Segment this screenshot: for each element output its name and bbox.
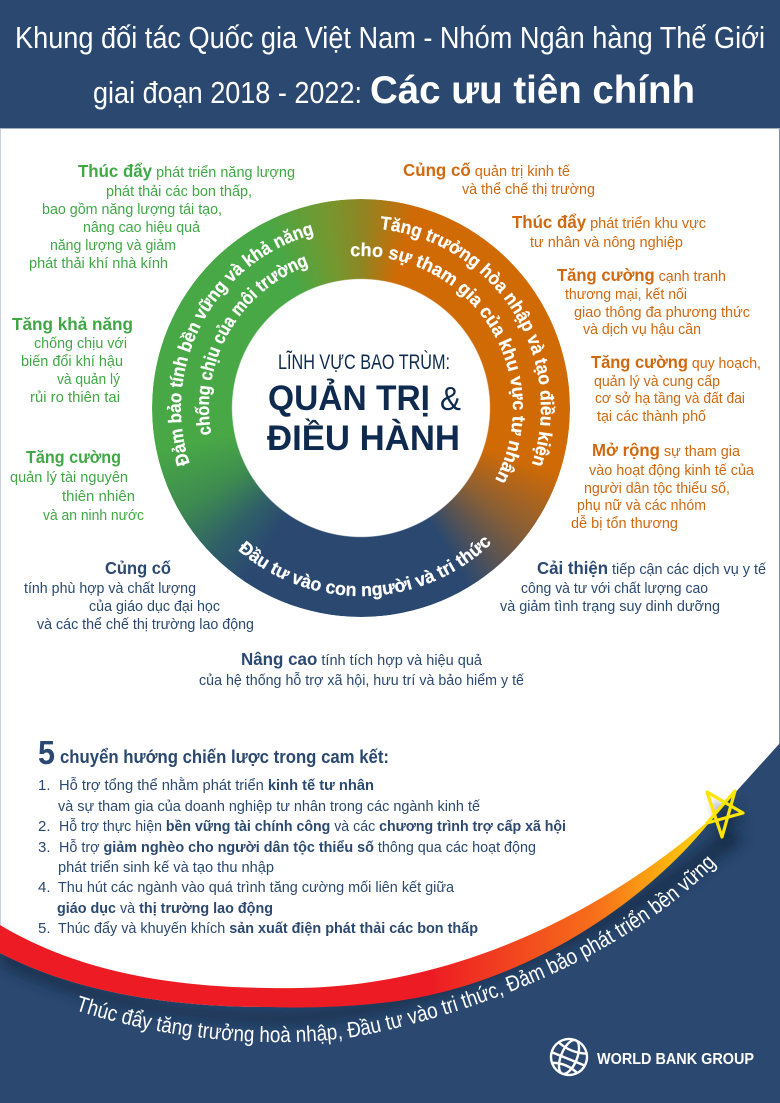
navy text: higher education (24, 558, 254, 633)
commitments list (38, 777, 566, 937)
navy text: social protection: của hệ thống hỗ trợ xã hội, hưu trí và bảo hiểm y tế (199, 672, 525, 689)
commitments heading: chuyển hướng chiến lược trong cam kết: (60, 747, 389, 767)
orange text: trade and logistics: thương mại, kết nối (565, 286, 687, 303)
navy text: higher education: và các thể chế thị trường lao động (37, 616, 254, 633)
curved footer slogan: Thúc đẩy tăng trưởng hoà nhập, Đầu tư vào tri thức, Đảm bảo phát triển bền vững (79, 856, 718, 1046)
navy text: health (500, 558, 767, 615)
commitments list: Hỗ trợ giảm nghèo cho người dân tộc thiểu số thông qua các hoạt động (59, 839, 536, 856)
title: giai đoạn 2018 - 2022: (93, 75, 362, 110)
commitments heading (38, 734, 389, 771)
center: cross-cutting area: LĨNH VỰC BAO TRÙM: (278, 350, 450, 374)
ring labels: Tăng trưởng hòa nhập và tạo điều kiện (381, 216, 556, 466)
commitments list: 5. (38, 920, 51, 937)
title (15, 20, 765, 112)
star icon (707, 791, 743, 837)
green text: resilience (12, 314, 133, 406)
center: cross-cutting area (267, 350, 461, 458)
orange text: urban planning: Tăng cường quy hoạch, (591, 352, 761, 372)
green text: natural resources: và an ninh nước (43, 507, 144, 524)
center: cross-cutting area: & (440, 380, 461, 417)
world bank group logo: WORLD BANK GROUP (597, 1051, 754, 1068)
green text: resilience: rủi ro thiên tai (30, 389, 120, 406)
green text: energy: bao gồm năng lượng tái tạo, (42, 201, 222, 218)
ring labels (166, 216, 556, 600)
commitments heading: 5 (38, 734, 55, 771)
orange text: urban planning: tại các thành phố (597, 408, 707, 425)
commitments list: Thúc đẩy và khuyến khích sản xuất điện phát thải các bon thấp (58, 920, 478, 937)
commitments list: 4. (38, 879, 51, 896)
navy text: health: và giảm tình trạng suy dinh dưỡng (500, 598, 720, 615)
ring labels: Đảm bảo tính bền vững và khả năng (166, 224, 314, 466)
ring labels: Đầu tư vào con người và tri thức (238, 538, 490, 600)
navy text: social protection (199, 649, 525, 689)
navy text: higher education: tính phù hợp và chất lượng (24, 580, 196, 597)
navy text: social protection: Nâng cao tính tích hợp và hiệu quả (241, 649, 483, 669)
center: cross-cutting area: ĐIỀU HÀNH (267, 418, 460, 458)
star shadow (712, 799, 748, 845)
red to yellow swoosh (0, 815, 715, 1007)
commitments list: 1. (38, 777, 51, 794)
green text: resilience: chống chịu với (34, 335, 127, 352)
commitments list: phát triển sinh kế và tạo thu nhập (58, 859, 274, 876)
green text: natural resources (10, 447, 144, 524)
commitments list: Thu hút các ngành vào quá trình tăng cường mối liên kết giữa (58, 879, 455, 896)
orange text: urban planning: cơ sở hạ tầng và đất đai (595, 390, 745, 407)
navy text: higher education: của giáo dục đại học (89, 598, 220, 615)
commitments list: 2. (38, 818, 51, 835)
green text: resilience: biến đổi khí hậu (21, 353, 123, 370)
orange text: trade and logistics: và dịch vụ hậu cần (583, 321, 701, 338)
orange text: trade and logistics: Tăng cường cạnh tranh (557, 265, 726, 285)
swoosh shadow (0, 825, 745, 1024)
green text: resilience: và quản lý (57, 371, 120, 388)
commitments list: Hỗ trợ thực hiện bền vững tài chính công và các chương trình trợ cấp xã hội (59, 818, 566, 835)
orange text: inclusion: dễ bị tổn thương (571, 515, 678, 532)
commitments list: Hỗ trợ tổng thể nhằm phát triển kinh tế tư nhân (59, 777, 374, 794)
orange text: inclusion: người dân tộc thiểu số, (584, 480, 730, 497)
orange text: inclusion: vào hoạt động kinh tế của (589, 462, 755, 479)
ring labels: cho sự tham gia của khu vực tư nhân (350, 242, 525, 482)
world bank group logo (546, 1034, 754, 1080)
orange text: urban planning: quản lý và cung cấp (594, 373, 720, 390)
navy text: health: Cải thiện tiếp cận các dịch vụ y tế (537, 558, 767, 578)
commitments list: và sự tham gia của doanh nghiệp tư nhân trong các ngành kinh tế (58, 798, 481, 815)
orange text: inclusion (571, 440, 755, 532)
green text: natural resources: Tăng cường (26, 447, 121, 467)
green text: energy: phát thải các bon thấp, (106, 183, 252, 200)
green text: resilience: Tăng khả năng (12, 314, 133, 334)
orange text: inclusion: Mở rộng sự tham gia (592, 440, 741, 460)
commitments list: giáo dục và thị trường lao động (57, 900, 273, 917)
green text: energy: năng lượng và giảm (50, 237, 176, 254)
green text: energy: Thúc đẩy phát triển năng lượng (78, 161, 295, 181)
orange text: private sector (512, 212, 706, 251)
navy text: higher education: Củng cố (105, 558, 171, 578)
ring: gradient donut (152, 199, 570, 617)
ring labels: chống chịu của môi trường (194, 256, 308, 435)
orange text: trade and logistics (557, 265, 750, 338)
title: Các ưu tiên chính (370, 69, 695, 112)
orange text: economic governance (403, 160, 595, 198)
footer navy curve (0, 743, 780, 1103)
orange text: economic governance: Củng cố quản trị kinh tế (403, 160, 571, 180)
green text: natural resources: quản lý tài nguyên (10, 469, 128, 486)
green text: energy: phát thải khí nhà kính (29, 255, 168, 272)
green text: energy: nâng cao hiệu quả (83, 219, 201, 236)
orange text: economic governance: và thể chế thị trường (462, 181, 595, 198)
green text: energy (29, 161, 295, 272)
navy text: health: công và tư với chất lượng cao (521, 580, 708, 597)
orange text: trade and logistics: giao thông đa phương thức (574, 304, 750, 321)
orange text: private sector: tư nhân và nông nghiệp (530, 234, 683, 251)
green text: natural resources: thiên nhiên (62, 488, 135, 505)
commitments list: 3. (38, 839, 51, 856)
orange text: inclusion: phụ nữ và các nhóm (577, 497, 706, 514)
orange text: private sector: Thúc đẩy phát triển khu vực (512, 212, 706, 232)
center: cross-cutting area: QUẢN TRỊ (268, 378, 430, 418)
orange text: urban planning (591, 352, 761, 425)
